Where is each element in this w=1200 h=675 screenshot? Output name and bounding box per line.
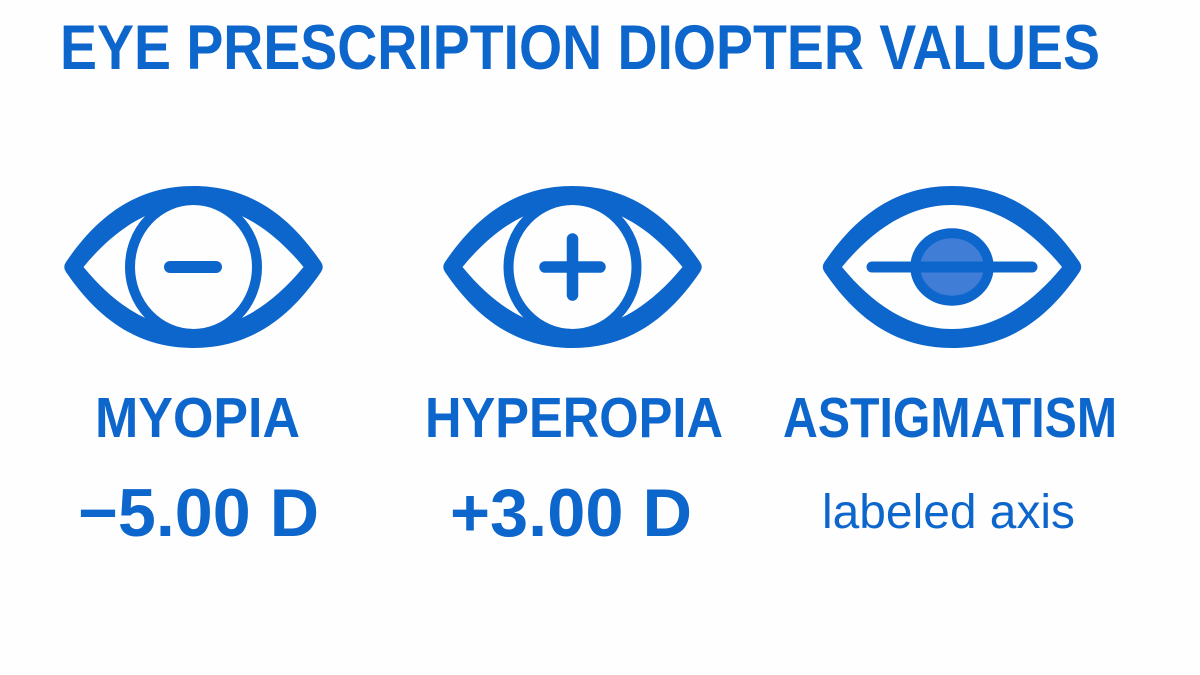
label: hyperopia: HYPEROPIA [425,386,723,450]
value: astigmatism axis: labeled axis [822,486,1075,539]
label: astigmatism: ASTIGMATISM [783,386,1117,450]
icon: hyperopia eye with plus [443,186,702,348]
label: myopia: MYOPIA [95,386,300,450]
value: myopia diopter: −5.00 D [78,475,319,551]
icon: myopia eye with minus [64,186,323,348]
value: hyperopia diopter: +3.00 D [450,475,692,551]
icon: astigmatism eye with axis line [823,186,1081,348]
